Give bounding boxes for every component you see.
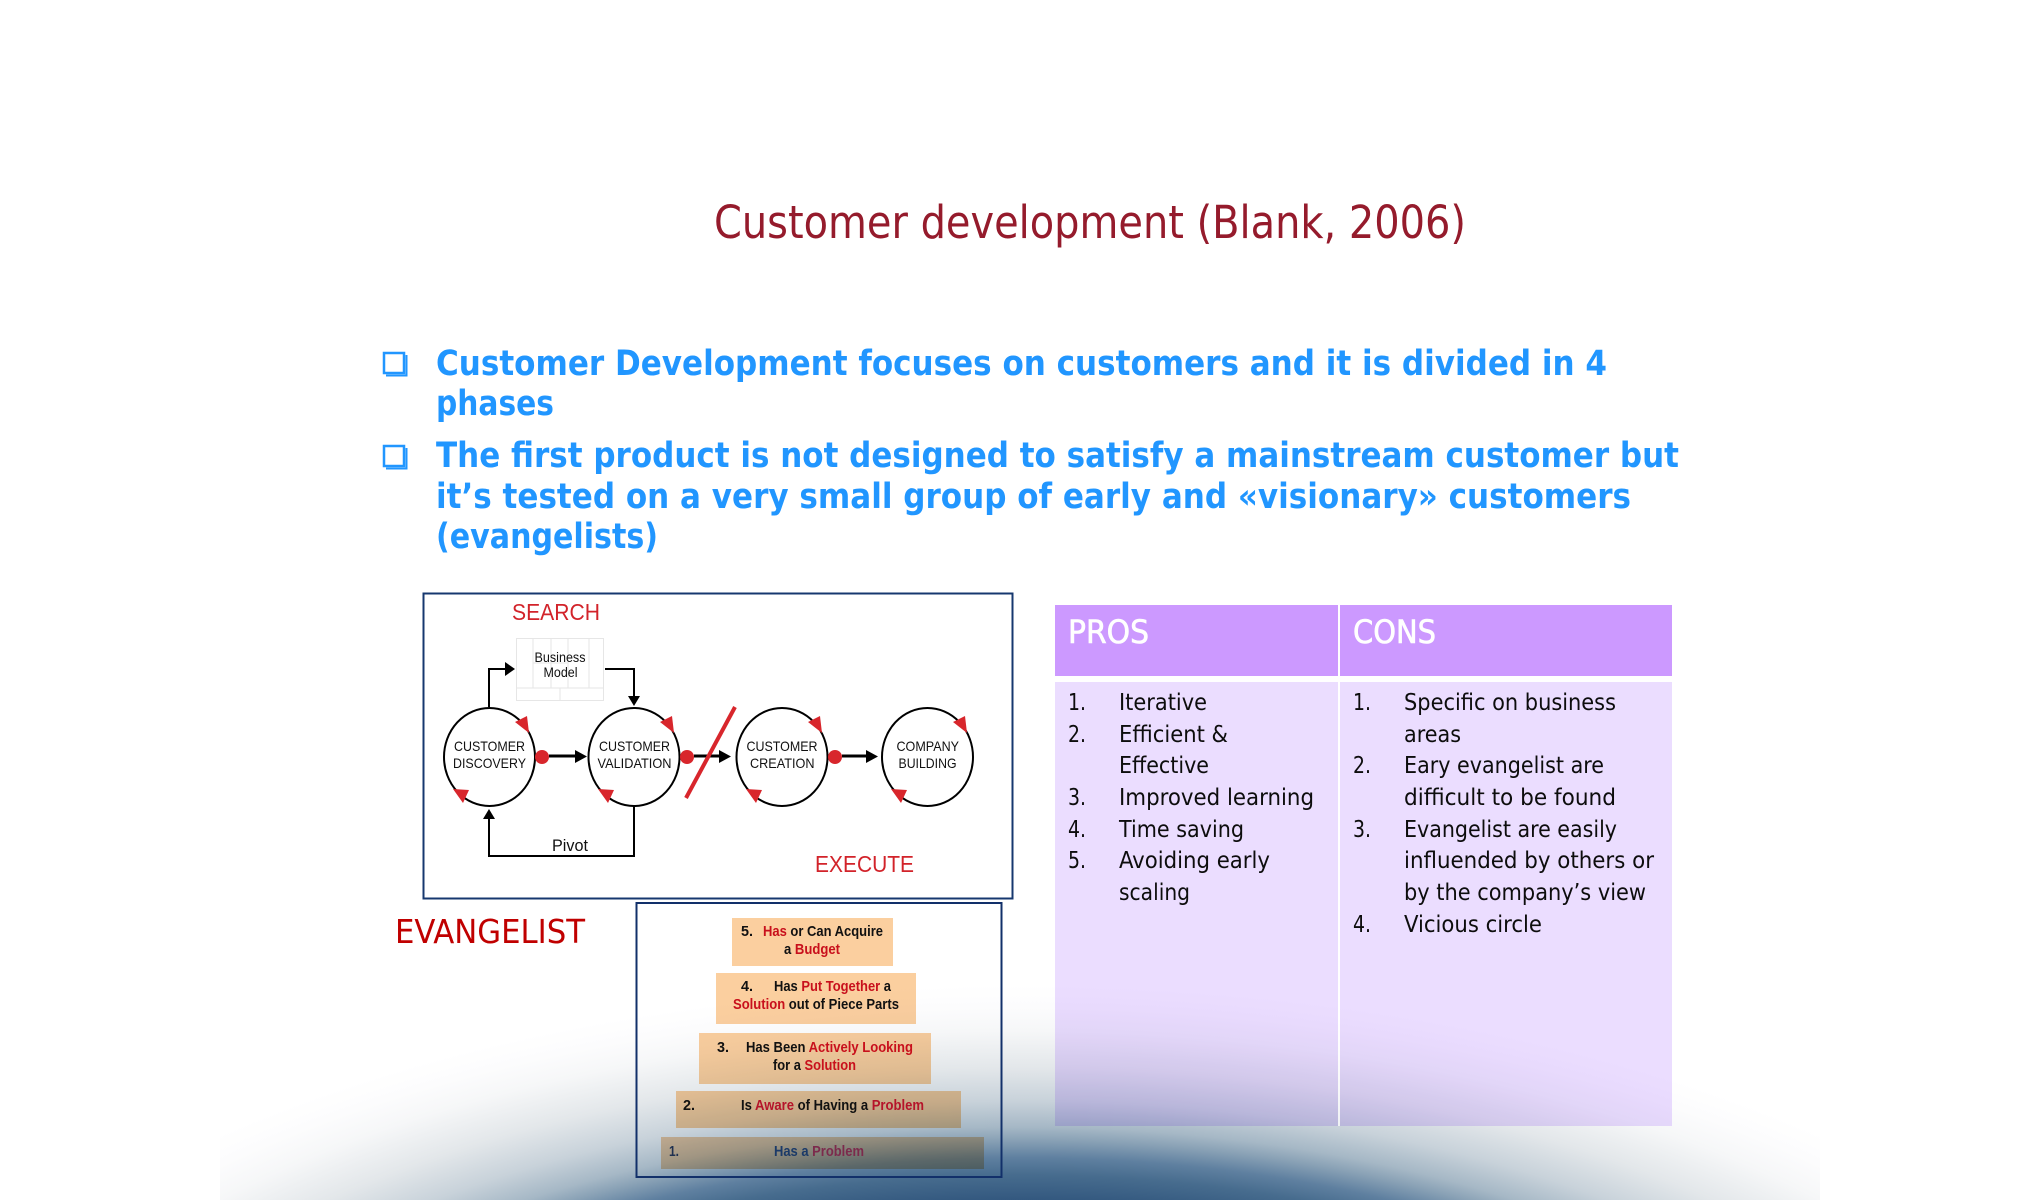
pros list: 5. [1068,848,1086,874]
cons list: by the company’s view [1404,880,1646,906]
pros header [1055,605,1338,676]
step 2: Is Aware of Having a Problem [741,1097,924,1114]
circle: company building [882,708,973,806]
panel: pros and cons table [1055,605,1672,1126]
bullet 1 text: Customer Development focuses on customers and it is divided in 4 [436,344,1607,384]
bullet 1 icon [384,353,406,376]
label: pivot: Pivot [552,836,588,855]
arrow: business model to validation [605,669,640,706]
cons list: Eary evangelist are [1404,753,1604,779]
business model canvas [516,638,604,701]
pros list: 4. [1068,817,1086,843]
arrow: discovery to validation [535,750,587,764]
step 1 [661,1137,984,1169]
pros list [1068,690,1314,906]
step 5: a Budget [784,941,840,958]
pros header: PROS [1068,613,1149,651]
arrow: validation to creation [680,750,731,764]
step 3 [699,1033,931,1084]
pros list: scaling [1119,880,1190,906]
step 5: Has or Can Acquire [763,923,883,940]
step 3: for a Solution [773,1057,856,1074]
label: search: SEARCH [512,599,600,625]
bullet 2 icon [384,446,406,468]
cons list: 1. [1353,690,1371,716]
pros list: Avoiding early [1119,848,1270,874]
arrow: discovery to business model [489,662,515,707]
step 4: Has Put Together a [774,978,892,995]
cons list: difficult to be found [1404,785,1616,811]
step 2 [676,1091,961,1128]
bullet 1 text [436,344,1607,424]
label: execute: EXECUTE [815,851,914,877]
step 1: 1. [669,1143,679,1160]
cons list: Evangelist are easily [1404,817,1617,843]
bullet 2 text [436,436,1679,557]
cons list: areas [1404,722,1461,748]
column divider [1338,682,1340,1126]
bullet 2 text: (evangelists) [436,517,658,557]
pros list: Time saving [1118,817,1244,843]
pros body background [1055,682,1338,1126]
pros list: 2. [1068,722,1086,748]
step 2: 2. [683,1097,695,1114]
cons list: Specific on business [1404,690,1616,716]
step 1: Has a Problem [774,1143,864,1160]
step 4: Solution out of Piece Parts [733,996,899,1013]
pros list: Improved learning [1119,785,1314,811]
cons list: 4. [1353,912,1371,938]
title: Customer development (Blank, 2006) [714,196,1466,249]
arrow: creation to building [828,750,878,764]
circle: customer discovery [444,708,535,806]
cons list: influended by others or [1404,848,1655,874]
pros list: Iterative [1119,690,1207,716]
circle: company building: BUILDING [898,755,956,771]
cons list: 2. [1353,753,1371,779]
panel: customer development process diagram [424,594,1012,898]
cons list: 3. [1353,817,1371,843]
step 4: 4. [741,978,753,995]
red slash [686,707,735,798]
circle: customer validation: CUSTOMER [599,738,670,754]
circle: company building: COMPANY [896,738,960,754]
pros list: 3. [1068,785,1086,811]
business model canvas: Model [544,664,578,680]
bullet 1 text: phases [436,384,554,424]
circle: customer creation: CREATION [750,755,814,771]
step 3: 3. [717,1039,729,1056]
circle: customer discovery: CUSTOMER [454,738,525,754]
step 5: 5. [741,923,753,940]
pros list: 1. [1068,690,1086,716]
bullet 2 text: it’s tested on a very small group of early and «visionary» customers [436,477,1631,517]
cons header: CONS [1353,613,1436,651]
pros list: Efficient & [1119,722,1228,748]
step 5 [732,918,893,966]
cons header [1340,605,1672,676]
arrow: pivot loop [483,806,634,856]
step 4 [716,973,916,1024]
bullet list [384,344,1679,557]
step 3: Has Been Actively Looking [746,1039,913,1056]
circle: customer validation: VALIDATION [598,755,672,771]
heading: evangelist: EVANGELIST [395,912,586,951]
pros list: Effective [1119,753,1209,779]
bullet 2 text: The first product is not designed to satisfy a mainstream customer but [436,436,1679,476]
cons list: Vicious circle [1404,912,1542,938]
circle: customer discovery: DISCOVERY [453,755,527,771]
business model canvas: Business [534,649,586,665]
panel: evangelist pyramid [636,903,1002,1177]
circle: customer creation [736,708,828,806]
cons body background [1340,682,1672,1126]
circle: customer validation [588,708,680,806]
circle: customer creation: CUSTOMER [746,738,818,754]
cons list [1353,690,1655,938]
